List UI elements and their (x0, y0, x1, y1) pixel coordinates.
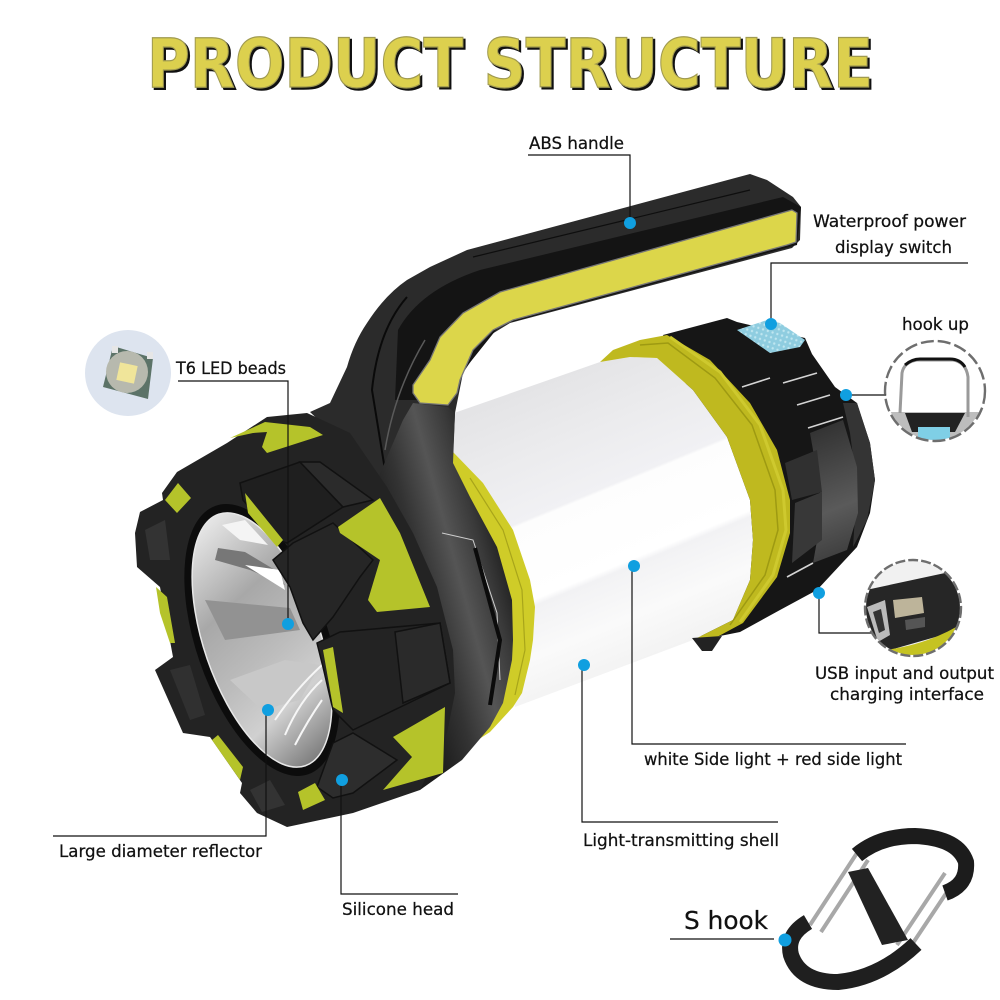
head collar (360, 403, 513, 790)
rear yellow ring (600, 335, 790, 640)
lantern illustration (135, 174, 875, 827)
callout: T6 LED beads (85, 330, 294, 630)
callout: USB input and output charging interface: charging interface (830, 685, 984, 705)
foot (692, 636, 722, 651)
callout: light-transmitting shell (578, 659, 779, 851)
callout: T6 LED beads: T6 LED beads (175, 359, 286, 379)
handle (310, 174, 801, 510)
rear cap (663, 318, 875, 640)
yellow head patches (156, 422, 445, 810)
lamp shell (450, 357, 753, 707)
callout: USB input and output charging interface (813, 560, 994, 705)
callout: silicone head (336, 774, 458, 920)
icon: S hook carabiner (790, 836, 966, 982)
inset: USB port (865, 560, 961, 660)
callout: ABS handle (528, 134, 636, 229)
inset: LED bead (85, 330, 171, 416)
inset: hook up (885, 340, 985, 441)
head body (135, 413, 455, 827)
callout: USB input and output charging interface: USB input and output (815, 664, 994, 684)
callout: ABS handle: ABS handle (529, 134, 624, 154)
callout: S hook: S hook (684, 906, 769, 935)
callout: waterproof power display switch: Waterproof power (813, 212, 966, 232)
callout: white side light + red side light (628, 560, 906, 770)
front yellow ring (445, 450, 535, 745)
callout: silicone head: Silicone head (342, 900, 454, 920)
title: PRODUCT STRUCTURE (149, 27, 875, 106)
callout: large diameter reflector: Large diameter reflector (59, 842, 262, 862)
callout: large diameter reflector (53, 704, 274, 862)
callout: waterproof power display switch (765, 212, 968, 330)
callout: hook up (840, 315, 985, 441)
callout: S hook (670, 906, 792, 946)
title: PRODUCT STRUCTURE (147, 25, 873, 104)
reflector (153, 484, 371, 796)
callout: light-transmitting shell: Light-transmitting shell (583, 831, 779, 851)
callout: white side light + red side light: white Side light + red side light (644, 750, 902, 770)
callout: hook up: hook up (902, 315, 969, 335)
head flaps (240, 462, 450, 798)
callout: waterproof power display switch: display switch (835, 238, 952, 258)
power button (737, 320, 805, 353)
